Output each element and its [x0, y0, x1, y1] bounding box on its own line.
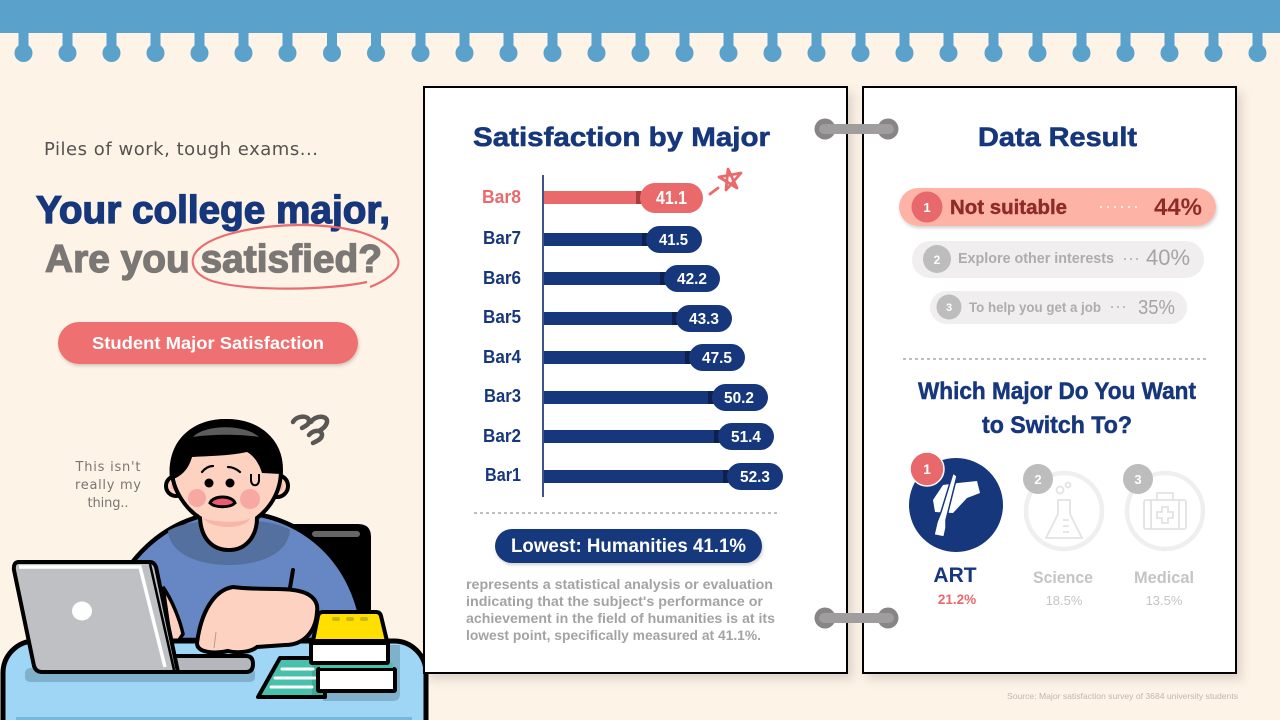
chart heading: Satisfaction by Major [473, 122, 771, 152]
bar chart [482, 175, 783, 497]
medical option: Medical [1134, 568, 1194, 587]
laptop [14, 562, 253, 672]
source note: Source: Major satisfaction survey of 3684 university students [1007, 691, 1238, 701]
rank 3 reason: 3 [946, 302, 952, 314]
bars [543, 191, 732, 483]
panel: satisfaction by major [424, 87, 847, 673]
value labels: 41.5 [659, 232, 688, 249]
hand-drawn highlight circle [193, 225, 398, 289]
rank 1 reason: 1 [923, 200, 931, 215]
rank 2 reason: 40% [1146, 245, 1190, 270]
value labels: 42.2 [677, 271, 707, 288]
collar shade [168, 520, 290, 565]
brows [202, 466, 240, 472]
main title [36, 189, 390, 281]
main title: Your college major, [36, 189, 390, 232]
description text: achievement in the field of humanities is at its [466, 611, 775, 626]
value labels: 41.1 [656, 188, 687, 208]
value pills [640, 183, 783, 490]
switch heading: Which Major Do You Want [918, 378, 1196, 405]
art option: ART [933, 564, 977, 587]
bar labels: Bar6 [483, 268, 521, 288]
book stack [311, 612, 395, 691]
description text: indicating that the subject's performance or [466, 594, 764, 609]
sleeve crease [290, 570, 293, 588]
medical option [1123, 464, 1203, 608]
speech note: really my [75, 478, 141, 493]
subtitle pill [58, 322, 358, 364]
rank 3 reason: To help you get a job [969, 299, 1101, 315]
rank 3 reason: 35% [1138, 297, 1175, 319]
description text: represents a statistical analysis or evaluation [466, 577, 773, 592]
science option: 18.5% [1046, 593, 1083, 608]
science option: 2 [1034, 472, 1042, 487]
science option [1023, 464, 1102, 608]
bar labels: Bar5 [483, 307, 521, 327]
value labels [656, 188, 770, 486]
hand on laptop [197, 587, 317, 652]
axis [542, 175, 544, 497]
rank 2 reason: Explore other interests [958, 250, 1114, 267]
lowest callout pill: Lowest: Humanities 41.1% [511, 536, 746, 557]
sweat drop [251, 474, 259, 485]
bar labels: Bar4 [483, 347, 521, 367]
science option: Science [1033, 568, 1093, 587]
notes [258, 658, 325, 697]
panel: data result [863, 87, 1236, 673]
bar labels: Bar3 [484, 386, 521, 406]
icon: first aid kit [1144, 493, 1186, 529]
illustration: student at desk [3, 419, 426, 720]
art option: 1 [923, 461, 931, 477]
hair [170, 419, 281, 480]
desk [3, 641, 426, 720]
handwritten intro line: Piles of work, tough exams... [44, 139, 318, 160]
switch heading [918, 378, 1196, 439]
icon: confused squiggles [293, 417, 327, 443]
bar labels [482, 187, 521, 485]
torso [100, 512, 364, 640]
data result heading: Data Result [978, 122, 1137, 152]
rank 2 reason: 2 [934, 253, 941, 267]
medical option: 3 [1134, 472, 1142, 487]
bar labels: Bar8 [482, 187, 521, 207]
bar end shadows [636, 191, 728, 483]
chair [290, 524, 371, 625]
notebook binding header [0, 0, 1280, 62]
rank 1 reason: 44% [1154, 194, 1202, 221]
speech note: This isn't [74, 460, 140, 475]
icon: hand with brush [933, 473, 980, 537]
switch heading: to Switch To? [982, 412, 1132, 439]
left arm [163, 587, 183, 650]
binder ring top [814, 118, 898, 140]
art option: 21.2% [938, 592, 976, 607]
rank 2 reason [912, 241, 1204, 278]
binder ring bottom [814, 608, 898, 628]
rank 1 reason [899, 188, 1216, 226]
mouth [210, 497, 235, 507]
lowest callout pill [495, 529, 762, 563]
bar labels: Bar1 [485, 465, 521, 485]
art option [909, 452, 1003, 607]
value labels: 52.3 [740, 469, 770, 486]
icon: star mark [710, 169, 741, 194]
description text [466, 577, 775, 643]
head and neck [166, 419, 288, 550]
bar labels: Bar2 [483, 426, 521, 446]
speech note [74, 460, 141, 511]
dashed divider [903, 358, 1208, 360]
speech note: thing.. [88, 496, 128, 511]
rank 1 reason: Not suitable [950, 197, 1067, 219]
value labels: 51.4 [731, 429, 761, 446]
dashed divider [474, 512, 778, 514]
icon: flask [1046, 482, 1082, 538]
eyes [204, 478, 214, 488]
subtitle pill: Student Major Satisfaction [92, 333, 324, 353]
bar labels: Bar7 [483, 228, 521, 248]
value labels: 43.3 [689, 311, 719, 328]
cheeks [188, 489, 206, 507]
rank 3 reason [930, 291, 1187, 324]
value labels: 50.2 [724, 390, 754, 407]
medical option: 13.5% [1146, 593, 1183, 608]
value labels: 47.5 [702, 350, 732, 367]
description text: lowest point, specifically measured at 41.1%. [466, 628, 761, 643]
main title: Are you satisfied? [45, 238, 382, 281]
